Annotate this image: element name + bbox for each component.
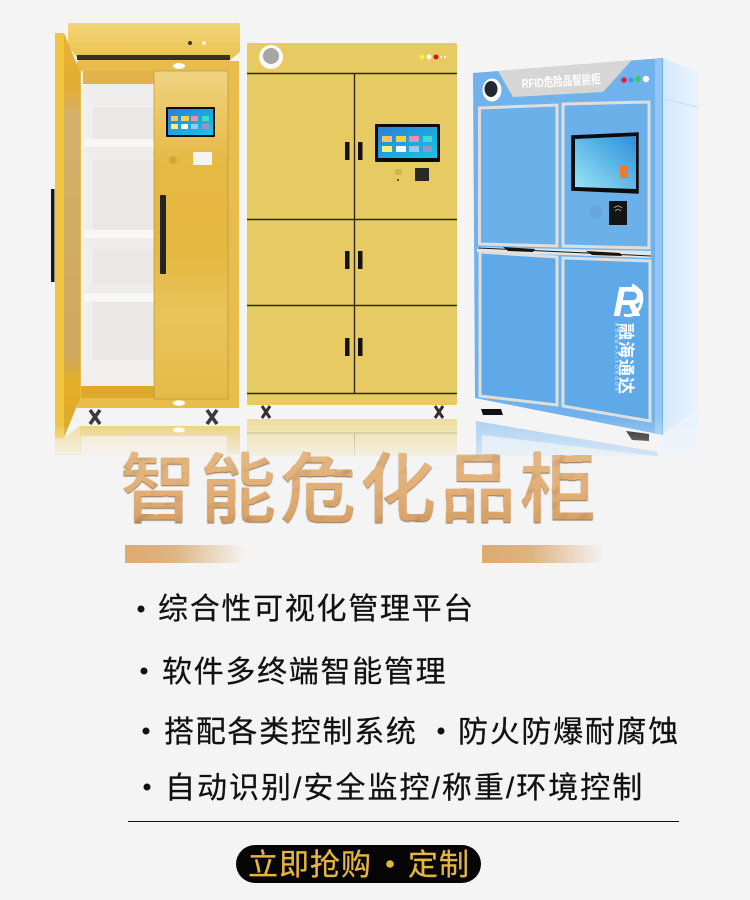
- door touch screen: [166, 107, 215, 137]
- side panel: [662, 58, 698, 435]
- cabinet lid: [68, 23, 240, 61]
- camera: [259, 45, 283, 69]
- outer handle: [51, 189, 54, 282]
- divider line: [128, 821, 679, 822]
- feature: monitoring: 自动识别/安全监控/称重/环境控制: [165, 772, 644, 805]
- feature: multi-terminal: 软件多终端智能管理: [162, 656, 447, 689]
- lower right door: [563, 258, 650, 421]
- floor reflection: [80, 426, 240, 455]
- cabinet: open yellow cabinet: [51, 23, 241, 456]
- upper right door: [563, 102, 649, 248]
- cabinet: middle yellow locker: [247, 43, 457, 456]
- lower left door: [480, 252, 557, 405]
- blue camera: [482, 78, 502, 102]
- locker casters: [262, 406, 443, 418]
- brand logo: R: [613, 278, 644, 325]
- blue reflection: [474, 412, 699, 456]
- locker touch screen: [375, 124, 440, 162]
- door lines: [247, 73, 457, 394]
- NFC reader: [590, 201, 627, 225]
- front: [473, 58, 663, 435]
- blue touch screen: [572, 133, 638, 193]
- feature list: [138, 593, 680, 805]
- card reader: [395, 168, 429, 181]
- feature: fire and explosion proof: 防火防爆耐腐蚀: [458, 716, 680, 749]
- interior shelves: [81, 71, 155, 398]
- call to action pill: [236, 845, 481, 883]
- locker reflection: [247, 419, 457, 456]
- status lights: [621, 76, 649, 83]
- decorative gradient bar: right: [482, 545, 605, 563]
- casters: [90, 410, 217, 424]
- decorative gradient bar: left: [125, 545, 246, 563]
- indicator lights: [420, 54, 446, 60]
- feature: visual platform: 综合性可视化管理平台: [158, 593, 475, 626]
- cabinet: blue RFID cabinet: [473, 58, 699, 456]
- middle divider: [477, 247, 651, 258]
- feature: control systems: 搭配各类控制系统: [164, 716, 418, 749]
- brand logo: RONGHAITONGDA: [614, 323, 619, 393]
- locker handles: [345, 142, 362, 356]
- right door: [154, 71, 228, 399]
- door handle: [160, 195, 166, 274]
- cabinet body: [77, 61, 239, 408]
- call to action pill: 立即抢购: [248, 849, 372, 882]
- open left door: [55, 33, 80, 438]
- upper left door: [480, 105, 557, 246]
- feet: [481, 409, 649, 441]
- brand logo: [613, 278, 644, 395]
- call to action pill: 定制: [408, 849, 470, 882]
- RFID nameplate: [498, 60, 632, 97]
- brand logo: 融海通达: [616, 323, 635, 395]
- locker body: [247, 43, 457, 405]
- RFID nameplate: RFID危险品智能柜: [521, 71, 601, 91]
- title: 智能危化品柜: [120, 428, 600, 538]
